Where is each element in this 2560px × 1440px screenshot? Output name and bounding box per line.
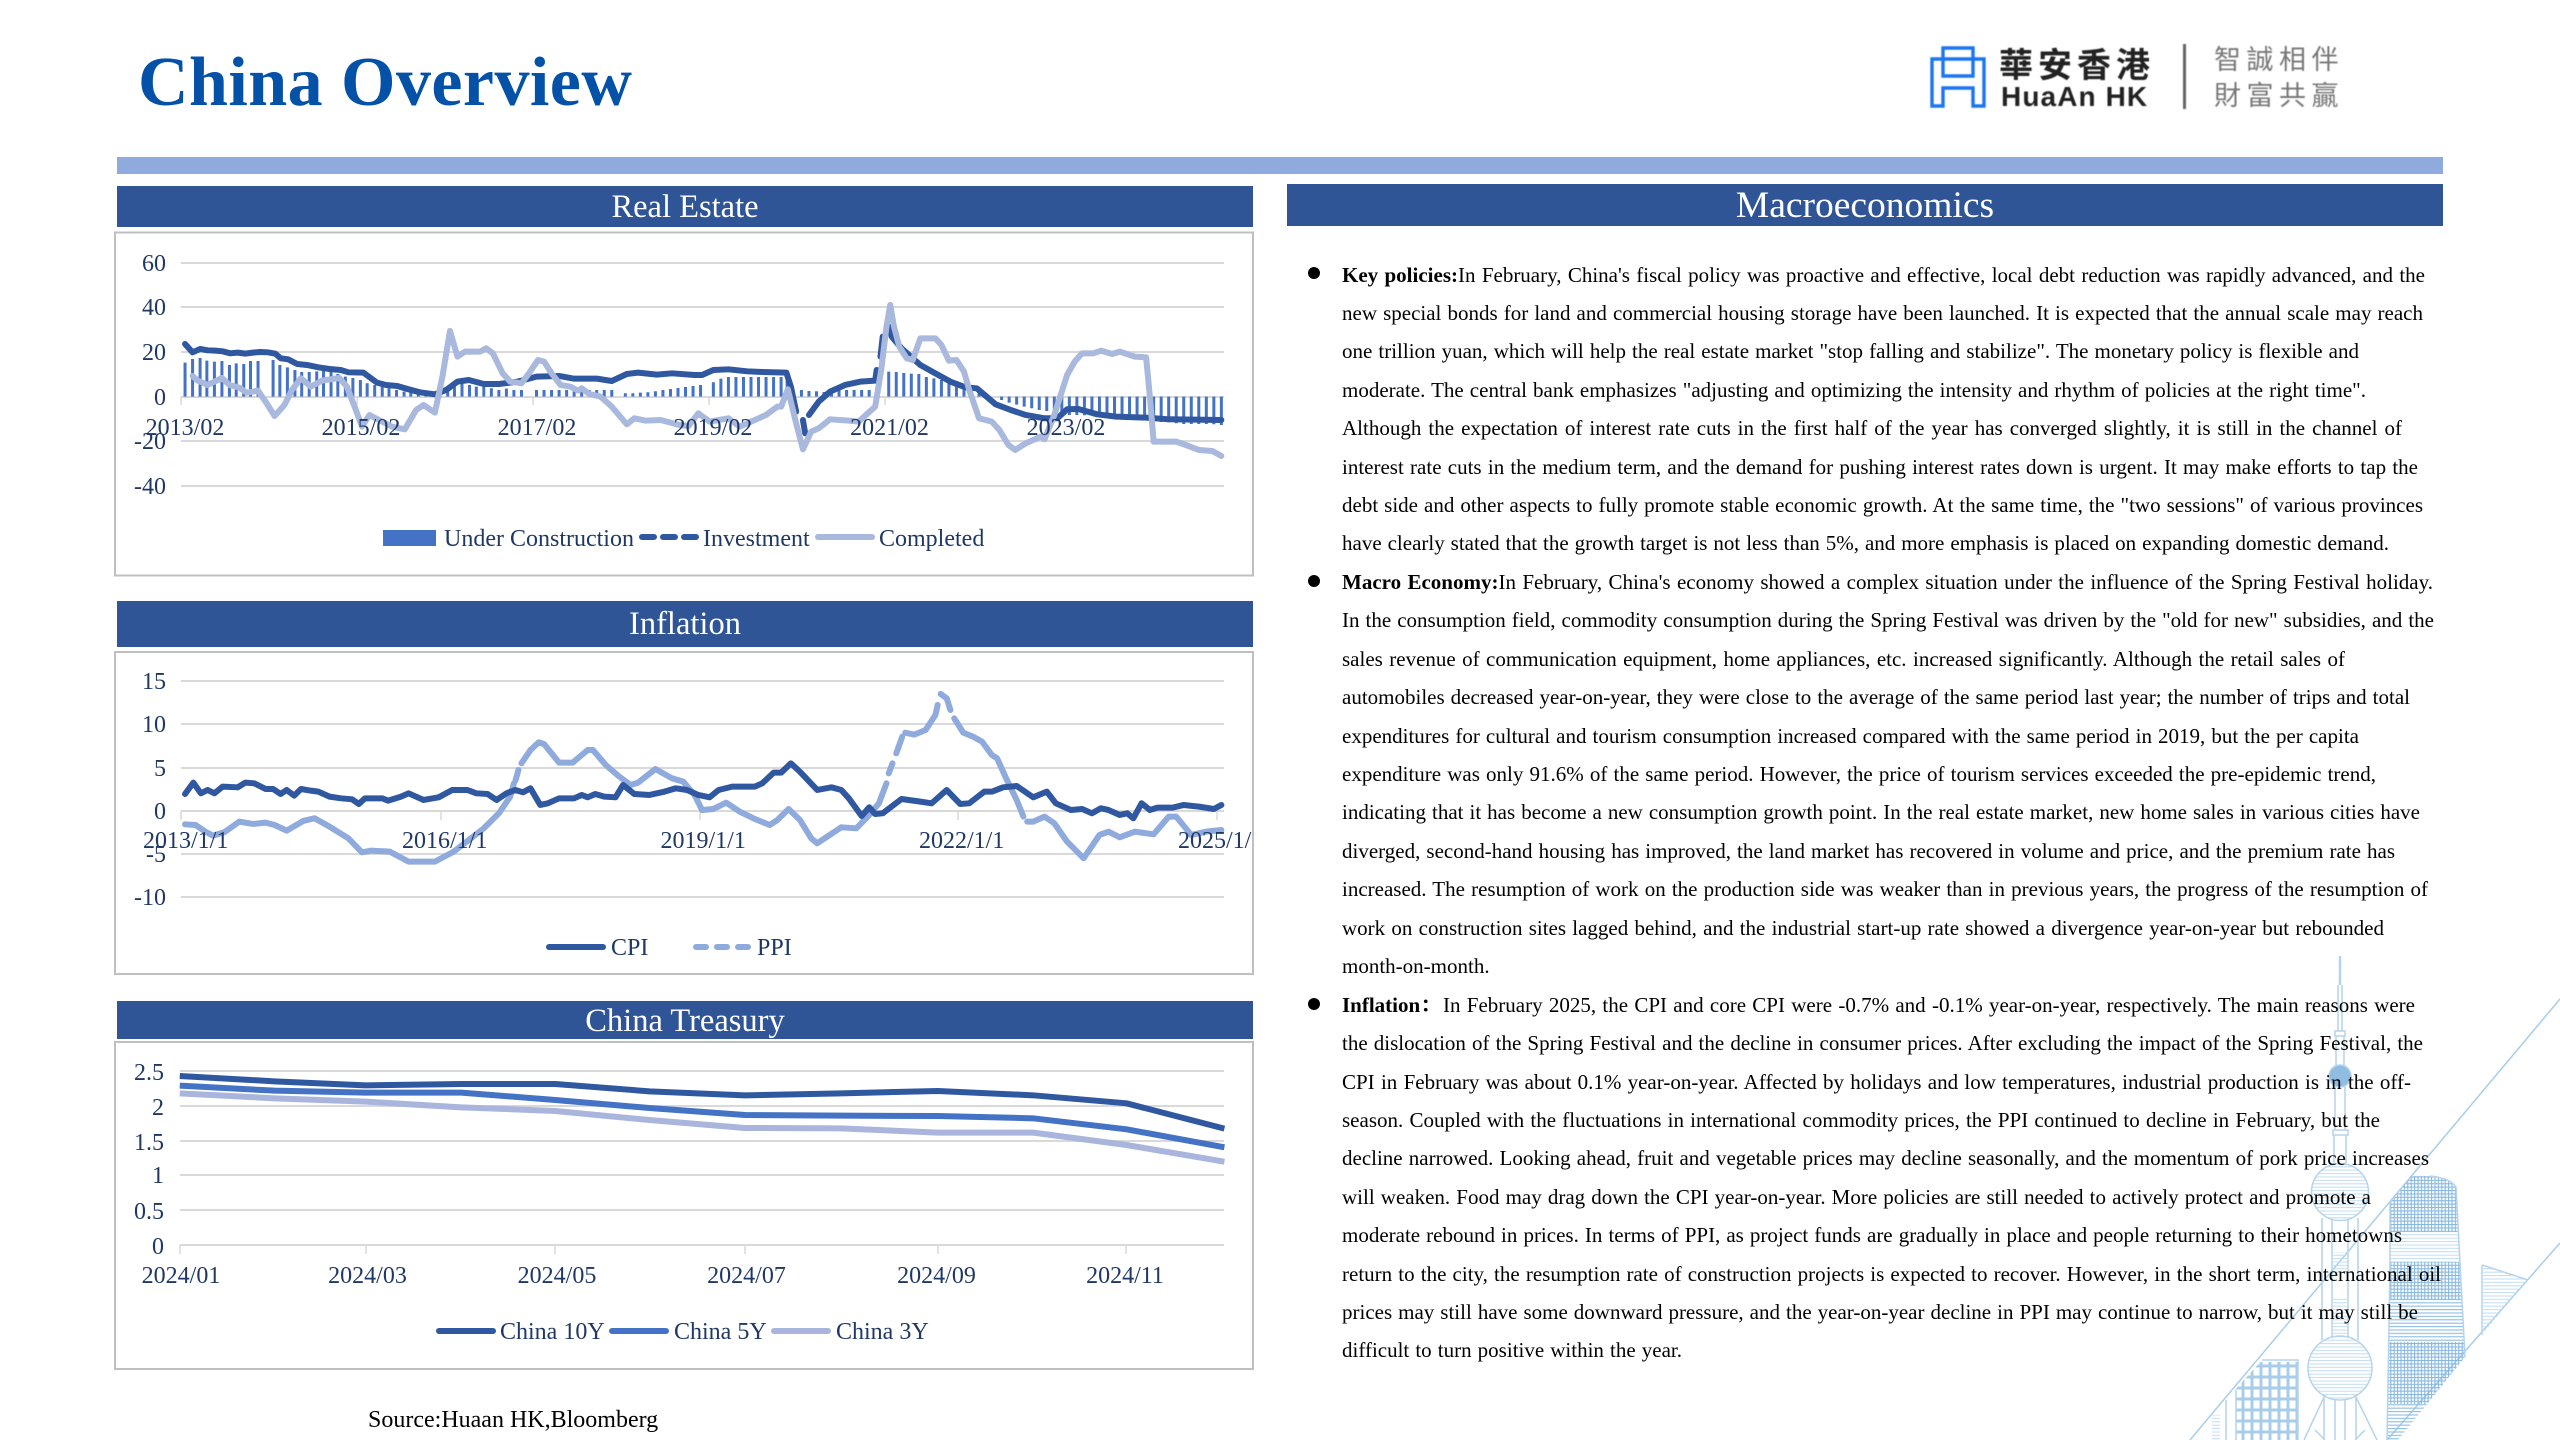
axis labels: China Treasury: 2.5 — [134, 1060, 164, 1086]
text block: macro economy: expenditures for cultural and tourism consumption increased compared with the same period in 2019, but the per capita — [1342, 724, 2359, 748]
axis labels: Inflation: 15 — [142, 669, 166, 695]
date labels: Real Estate: 2017/02 — [498, 415, 576, 441]
text block: inflation: In February 2025, the CPI and core CPI were -0.7% and -0.1% year-on-year, respectively. The main reasons were — [1443, 993, 2415, 1017]
date labels: China Treasury: 2024/01 — [142, 1263, 220, 1289]
text block: key policies: one trillion yuan, which will help the real estate market "stop falling and stabilize". The monetary policy is flexible and — [1342, 339, 2359, 363]
title: China Overview — [138, 44, 632, 121]
logo: HuaAn HK — [1930, 38, 2344, 113]
bar series: Under Construction — [185, 358, 1221, 425]
axis labels: Inflation — [134, 669, 166, 911]
text block: macro economy: Macro Economy:In February, China's economy showed a complex situation under the influence of the Spring Festival holiday. — [1342, 570, 2433, 594]
legend: China Treasury: China 5Y — [674, 1319, 767, 1345]
text block: macro economy: In the consumption field, commodity consumption during the Spring Festival was driven by the "old for new" subsidies, and the — [1342, 608, 2434, 632]
heading: Real Estate: Real Estate — [611, 189, 759, 225]
text block: macro economy: work on construction sites lagged behind, and the industrial start-up rate showed a divergence year-on-year but rebounded — [1342, 916, 2384, 940]
date labels: Real Estate: 2019/02 — [674, 415, 752, 441]
legend: Inflation: CPI — [611, 935, 648, 961]
text block: macro economy — [1342, 570, 2434, 978]
text block: macro economy: month-on-month. — [1342, 954, 1490, 978]
heading: China Treasury — [117, 1001, 1253, 1039]
text block: macro economy: expenditure was only 91.6% of the same period. However, the price of tourism services exceeded the pre-epidemic trend, — [1342, 762, 2376, 786]
text block: macro economy: automobiles decreased year-on-year, they were close to the average of the same period last year; the number of trips and total — [1342, 685, 2410, 709]
panel: China Treasury chart — [115, 1042, 1253, 1369]
text block: inflation: difficult to turn positive within the year. — [1342, 1338, 1682, 1362]
logo divider — [2183, 44, 2186, 109]
axis labels: Real Estate: 60 — [142, 251, 166, 277]
bullet: macro economy — [1308, 575, 1320, 587]
axis labels: Inflation: 5 — [154, 756, 166, 782]
text block: inflation: will weaken. Food may drag down the CPI year-on-year. More policies are still needed to actively protect and promote a — [1342, 1185, 2371, 1209]
date labels: Real Estate — [146, 415, 1105, 441]
legend: China Treasury — [439, 1319, 929, 1345]
axis labels: Inflation: 10 — [142, 712, 166, 738]
legend: Real Estate — [383, 526, 984, 552]
panel: Real Estate chart — [115, 232, 1253, 576]
date labels: Inflation: 2013/1/1 — [143, 828, 228, 854]
panel: Inflation chart — [115, 652, 1253, 974]
logo slogan: 財富共贏 — [2214, 74, 2344, 113]
date labels: China Treasury: 2024/09 — [897, 1263, 976, 1289]
axis labels: Inflation: 0 — [154, 799, 166, 825]
text block: inflation: CPI in February was about 0.1% year-on-year. Affected by holidays and low temperatures, industrial production is in the off- — [1342, 1070, 2411, 1094]
heading: China Treasury: China Treasury — [585, 1003, 785, 1039]
line series: CPI — [185, 763, 1221, 818]
line series: Completed — [193, 305, 1221, 456]
text block: macro economy: increased. The resumption of work on the production side was weaker than in previous years, the progress of the resumption of — [1342, 877, 2428, 901]
date labels: Inflation: 2022/1/1 — [919, 828, 1004, 854]
text block: inflation: the dislocation of the Spring Festival and the decline in consumer prices. After excluding the impact of the Spring Festival, the — [1342, 1031, 2423, 1055]
bullet: key policies — [1308, 267, 1320, 279]
logo text: Chinese name: 華安香港 — [1999, 38, 2155, 87]
logo slogan: 智誠相伴 — [2214, 38, 2344, 77]
text block: macro economy: diverged, second-hand housing has improved, the land market has recovered in volume and price, and the premium rate has — [1342, 839, 2395, 863]
date labels: Real Estate: 2021/02 — [850, 415, 929, 441]
legend: China Treasury: China 3Y — [836, 1319, 929, 1345]
text block: key policies: Although the expectation of interest rate cuts in the first half of the year has converged slightly, it is still in the channel of — [1342, 416, 2402, 440]
legend: Inflation — [549, 935, 792, 961]
date labels: China Treasury — [142, 1263, 1164, 1289]
legend: China Treasury: China 10Y — [500, 1319, 605, 1345]
line series: China 3Y — [180, 1093, 1224, 1162]
line series: Investment — [185, 327, 1221, 433]
legend: Real Estate: Under Construction — [444, 526, 634, 552]
text block: key policies: have clearly stated that the growth target is not less than 5%, and more emphasis is placed on expanding domestic demand. — [1342, 531, 2389, 555]
decoration: Shanghai skyline line art — [2190, 956, 2560, 1440]
date labels: Real Estate: 2015/02 — [322, 415, 400, 441]
axis labels: Real Estate: -20 — [134, 429, 166, 455]
axis labels: China Treasury: 2 — [152, 1095, 164, 1121]
text block: key policies: new special bonds for land and commercial housing storage have been launched. It is expected that the annual scale may reach — [1342, 301, 2423, 325]
axis labels: China Treasury: 1.5 — [134, 1130, 164, 1156]
heading: Inflation — [117, 601, 1253, 647]
text block: key policies — [1342, 262, 2425, 555]
axis labels: Real Estate: 40 — [142, 295, 166, 321]
line series: PPI — [185, 694, 1221, 862]
date labels: China Treasury: 2024/11 — [1086, 1263, 1164, 1289]
text block: inflation: decline narrowed. Looking ahead, fruit and vegetable prices may decline seasonally, and the momentum of pork price increases — [1342, 1146, 2429, 1170]
text block: key policies: debt side and other aspects to fully promote stable economic growth. At the same time, the "two sessions" of various provinces — [1342, 493, 2423, 517]
date labels: Real Estate: 2013/02 — [146, 415, 224, 441]
date labels: China Treasury: 2024/03 — [328, 1263, 407, 1289]
text block: key policies: moderate. The central bank emphasizes "adjusting and optimizing the intensity and rhythm of policies at the right time". — [1342, 378, 2366, 402]
icon: logo mark — [1930, 45, 1986, 109]
date labels: China Treasury: 2024/05 — [518, 1263, 596, 1289]
axis labels: Inflation: -10 — [134, 885, 166, 911]
date labels: Inflation: 2019/1/1 — [660, 828, 746, 854]
text block: key policies: interest rate cuts in the medium term, and the demand for pushing interest rates down is urgent. It may make efforts to tap the — [1342, 455, 2418, 479]
axis labels: Real Estate — [134, 251, 166, 500]
text block: inflation: Inflation： — [1342, 993, 1441, 1017]
date labels: Inflation: 2025/1/ — [1178, 828, 1252, 854]
axis labels: Real Estate: -40 — [134, 474, 166, 500]
axis labels: China Treasury: 1 — [152, 1163, 164, 1189]
date labels: China Treasury: 2024/07 — [707, 1263, 786, 1289]
bullet: inflation — [1308, 998, 1320, 1010]
text block: inflation: prices may still have some downward pressure, and the year-on-year decline in PPI may continue to narrow, but it may still be — [1342, 1300, 2418, 1324]
text block: inflation: season. Coupled with the fluctuations in international commodity prices, the PPI continued to decline in February, but the — [1342, 1108, 2380, 1132]
text block: macro economy: sales revenue of communication equipment, home appliances, etc. increased significantly. Although the retail sales of — [1342, 647, 2345, 671]
legend: Real Estate: Investment — [703, 526, 810, 552]
heading: Real Estate — [117, 186, 1253, 227]
text block: inflation: return to the city, the resumption rate of construction projects is expected to recover. However, in the short term, international oil — [1342, 1262, 2441, 1286]
legend: Inflation: PPI — [757, 935, 792, 961]
legend: Real Estate: Completed — [879, 526, 984, 552]
axis labels: Real Estate: 0 — [154, 385, 166, 411]
axis labels: China Treasury: 0 — [152, 1234, 164, 1260]
text block: inflation: moderate rebound in prices. In terms of PPI, as project funds are gradually in place and people returning to their hometowns — [1342, 1223, 2402, 1247]
axis labels: Inflation: -5 — [146, 842, 166, 868]
text block: inflation — [1342, 993, 2441, 1362]
line series: China 10Y — [180, 1076, 1224, 1129]
axis labels: China Treasury — [134, 1060, 164, 1260]
axis labels: Real Estate: 20 — [142, 340, 166, 366]
heading: Macroeconomics — [1287, 184, 2443, 226]
heading: Macroeconomics: Macroeconomics — [1736, 185, 1994, 226]
top accent bar — [117, 157, 2443, 174]
line series: China 5Y — [180, 1086, 1224, 1147]
date labels: Inflation — [143, 828, 1252, 854]
heading: Inflation: Inflation — [629, 606, 741, 642]
date labels: Inflation: 2016/1/1 — [402, 828, 487, 854]
logo slogan — [2214, 38, 2344, 113]
axis labels: China Treasury: 0.5 — [134, 1199, 164, 1225]
date labels: Real Estate: 2023/02 — [1027, 415, 1105, 441]
source note: Source:Huaan HK,Bloomberg — [368, 1407, 658, 1433]
logo text: English name: HuaAn HK — [2001, 81, 2148, 112]
text block: key policies: Key policies:In February, China's fiscal policy was proactive and effective, local debt reduction was rapidly advanced, and the — [1342, 262, 2425, 286]
text block: macro economy: indicating that it has become a new consumption growth point. In the real estate market, new home sales in various cities have — [1342, 800, 2420, 824]
